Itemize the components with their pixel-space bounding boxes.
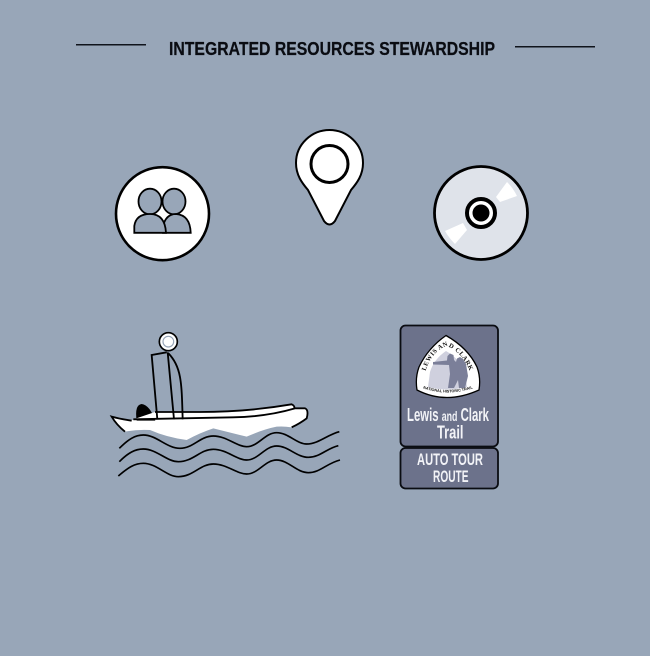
sign lower panel	[400, 448, 498, 488]
road sign	[400, 324, 499, 490]
boat gunwale	[133, 404, 294, 419]
right title rule	[515, 46, 595, 48]
icon: compact disc	[434, 166, 528, 260]
left title rule	[76, 44, 146, 46]
hull outline	[112, 408, 308, 432]
icon: person in boat on waves	[112, 333, 340, 477]
seated shape	[136, 404, 155, 421]
icon: people	[116, 167, 209, 260]
icon: map pin	[296, 130, 363, 224]
person	[152, 352, 183, 419]
trail shield: LEWIS AND CLARK	[422, 342, 474, 371]
trail shield	[416, 334, 480, 398]
waves	[119, 432, 339, 448]
sign text: Lewis and Clark Trail: Lewis and Clark	[407, 405, 490, 425]
trail shield: NATIONAL HISTORIC TRAIL	[423, 386, 473, 392]
sign upper panel	[400, 326, 498, 446]
title: INTEGRATED RESOURCES STEWARDSHIP	[169, 38, 495, 59]
sign text: Auto Tour Route: AUTO TOUR	[417, 450, 483, 469]
road sign: ROUTE	[433, 467, 468, 486]
road sign: Trail	[437, 422, 464, 442]
boat hull	[112, 407, 307, 440]
